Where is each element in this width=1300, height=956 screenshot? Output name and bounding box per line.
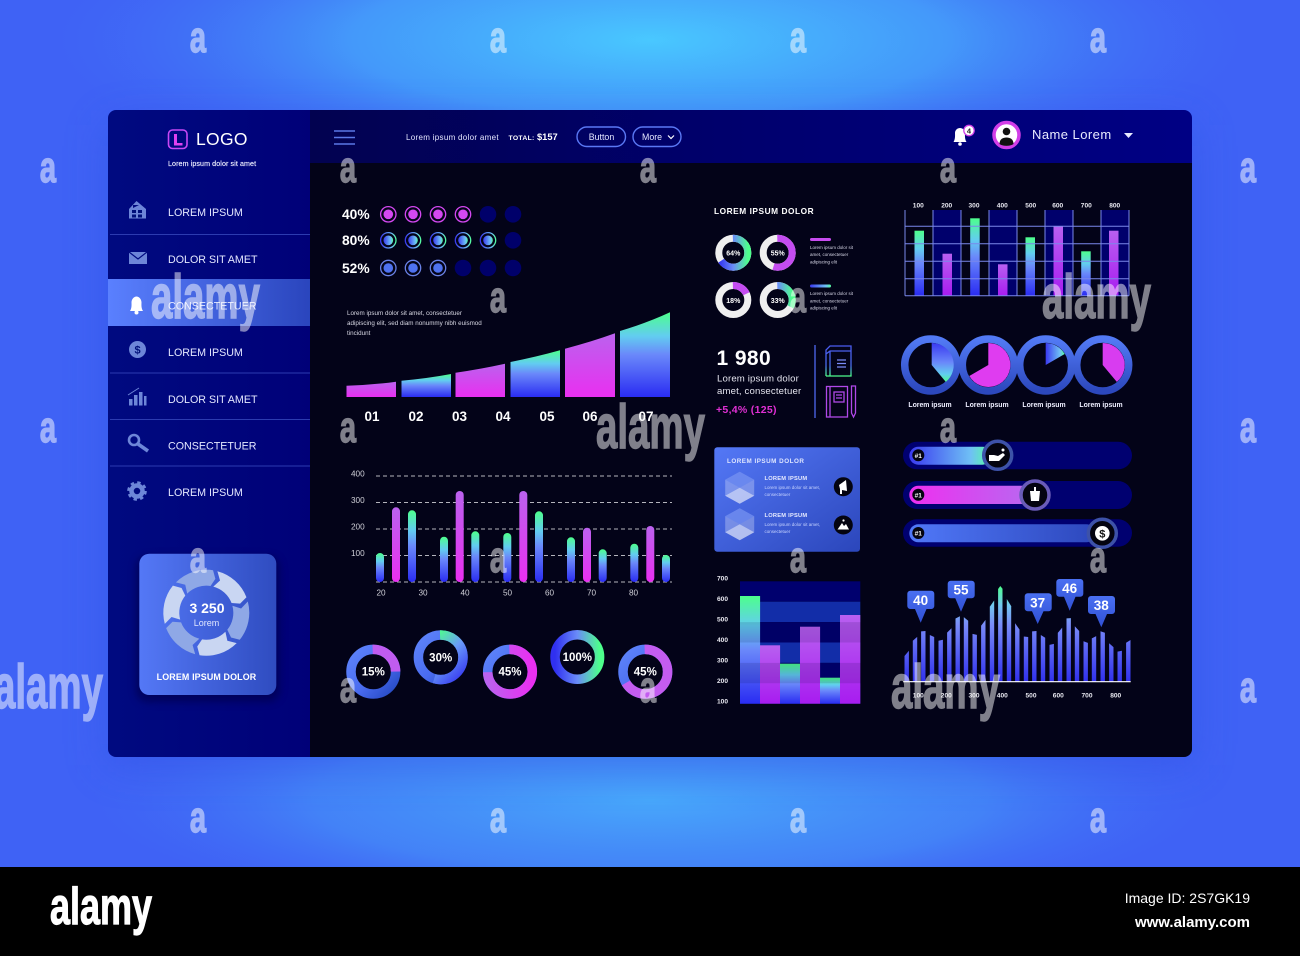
legend: amet, consectetuer xyxy=(810,298,849,304)
pie ring 2 xyxy=(962,339,1014,391)
y labels: 500 xyxy=(717,617,728,624)
watermarks: a xyxy=(190,532,206,581)
x labels: 05 xyxy=(539,409,555,424)
donut: 30%: 30% xyxy=(429,652,452,664)
watermarks: a xyxy=(940,142,956,191)
watermarks: a xyxy=(490,272,506,321)
icon: home xyxy=(129,201,146,218)
watermarks: a xyxy=(490,12,506,61)
knob xyxy=(1021,481,1049,509)
x labels: 100 xyxy=(913,202,924,210)
logo block: Lorem ipsum dolor sit amet xyxy=(168,160,256,168)
pie rings row xyxy=(905,339,1129,409)
tag: 37: 37 xyxy=(1030,595,1045,610)
watermarks: a xyxy=(1090,12,1106,61)
slider 2: #1 xyxy=(915,492,922,499)
x labels: 300 xyxy=(968,692,980,700)
x labels: 50 xyxy=(503,588,512,598)
slider 1: #1 xyxy=(915,453,922,460)
icon: megaphone xyxy=(834,477,853,496)
y labels: 600 xyxy=(717,596,728,603)
icon: bell xyxy=(130,296,143,314)
sidebar card: 3 250: LOREM IPSUM DOLOR xyxy=(157,672,257,682)
icon: dollar: $ xyxy=(134,344,141,356)
info card: cubes: LOREM IPSUM xyxy=(764,476,807,482)
button xyxy=(577,127,626,146)
icon: books xyxy=(826,346,851,376)
knob xyxy=(984,441,1012,469)
x labels: 70 xyxy=(587,588,596,598)
x labels: 200 xyxy=(941,202,953,210)
x labels: 30 xyxy=(418,588,428,598)
donut: 30% xyxy=(418,635,463,680)
x labels: 80 xyxy=(629,588,638,598)
stat block: 1 980: 1 980 xyxy=(716,347,771,370)
header controls: Lorem ipsum dolor amet xyxy=(406,133,499,142)
dashboard panel xyxy=(108,110,1192,757)
logo block xyxy=(168,129,256,168)
x labels: 700 xyxy=(1081,202,1092,210)
pie ring 1 xyxy=(905,339,957,391)
footer strip: www.alamy.com xyxy=(1134,914,1250,931)
text block: description: Lorem ipsum dolor sit amet, consectetuer xyxy=(347,310,462,317)
stat block: 1 980: Lorem ipsum dolor xyxy=(717,374,800,384)
user area xyxy=(954,122,1133,148)
column shading xyxy=(933,210,1129,296)
donut 55%: 55% xyxy=(771,250,785,258)
x labels: 800 xyxy=(1110,692,1122,700)
tag: 46 xyxy=(1056,579,1083,611)
x labels: 100 xyxy=(913,692,924,700)
watermarks: a xyxy=(940,402,956,451)
axis labels xyxy=(351,470,365,558)
more button: More xyxy=(642,132,662,142)
tag: 38: 38 xyxy=(1094,598,1109,613)
row 52% xyxy=(381,260,521,276)
tag: 55: 55 xyxy=(953,582,969,598)
sidebar menu: CONSECTETUER xyxy=(168,300,257,312)
legend: adipiscing elit xyxy=(810,306,838,310)
text block: description: tincidunt xyxy=(347,330,371,337)
panel: small donuts xyxy=(714,206,854,314)
knob xyxy=(1088,519,1116,547)
grid bar chart: 100-800 xyxy=(905,202,1129,296)
donut: 100% xyxy=(555,635,600,679)
percent dot rows: 80% xyxy=(342,233,370,248)
x labels: 06 xyxy=(582,409,598,424)
stat block: 1 980: amet, consectetuer xyxy=(717,386,802,397)
icon: dollar xyxy=(129,341,146,358)
tag: 40 xyxy=(907,591,934,623)
x labels xyxy=(364,409,654,424)
x labels: 500 xyxy=(1025,202,1037,210)
active item band xyxy=(108,279,310,326)
x labels: 20 xyxy=(376,588,386,598)
pie ring 4 xyxy=(1077,339,1129,391)
footer strip: alamy xyxy=(50,878,152,936)
info card: cubes: consectetuer xyxy=(764,529,791,534)
watermarks: a xyxy=(640,142,656,191)
y labels: 200 xyxy=(717,678,728,685)
x labels: 07 xyxy=(638,409,654,424)
watermarks: a xyxy=(790,792,806,841)
header controls xyxy=(334,127,681,146)
percent dot rows: 40% xyxy=(342,207,370,222)
sidebar card: 3 250: Lorem xyxy=(194,618,219,628)
spikes xyxy=(904,586,1130,682)
axis labels: 100 xyxy=(351,549,365,558)
menu labels: LOREM IPSUM xyxy=(168,207,243,219)
sidebar menu: LOREM IPSUM xyxy=(168,487,243,499)
pie rings row: Lorem ipsum xyxy=(908,402,952,409)
bands xyxy=(740,581,860,602)
watermarks: alamy xyxy=(891,653,1000,722)
header controls: $157 xyxy=(537,132,558,142)
legend: Lorem ipsum dolor sit xyxy=(810,245,854,250)
watermarks: a xyxy=(340,142,356,191)
row 40% xyxy=(381,206,521,223)
x labels: 600 xyxy=(1052,202,1064,210)
main dark area xyxy=(310,163,1192,757)
sidebar menu: DOLOR SIT AMET xyxy=(168,254,258,266)
axis labels: 200 xyxy=(351,522,365,532)
watermarks: a xyxy=(640,662,656,711)
x labels: 400 xyxy=(997,692,1008,700)
axis labels: 300 xyxy=(351,496,365,505)
watermarks: alamy xyxy=(596,393,705,462)
icon: hamburger menu xyxy=(334,131,355,144)
slider 2 xyxy=(903,481,1132,509)
y labels: 300 xyxy=(717,658,728,665)
watermarks: a xyxy=(1240,662,1256,711)
watermarks: alamy xyxy=(151,263,260,332)
watermarks: a xyxy=(790,272,806,321)
slider 3 xyxy=(903,519,1132,547)
row 80% xyxy=(381,232,521,249)
column chart with dashed grid xyxy=(351,470,672,598)
stat block: 1 980 xyxy=(716,345,856,418)
icon: mail xyxy=(129,252,147,264)
y labels xyxy=(717,576,728,706)
donut 33%: 33% xyxy=(771,298,785,305)
pie rings row: Lorem ipsum xyxy=(965,402,1009,409)
watermarks: a xyxy=(790,12,806,61)
watermarks: a xyxy=(190,12,206,61)
watermarks: a xyxy=(40,402,56,451)
watermarks: a xyxy=(1090,532,1106,581)
x labels: 04 xyxy=(495,409,511,424)
watermarks: a xyxy=(340,662,356,711)
legend: amet, consectetuer xyxy=(810,252,849,257)
sidebar menu xyxy=(108,201,310,500)
area bar chart: 01-07 xyxy=(346,312,670,424)
x labels: 03 xyxy=(452,409,467,424)
pie rings row: Lorem ipsum xyxy=(1022,402,1066,409)
x labels: 40 xyxy=(460,588,470,598)
percent dot rows xyxy=(342,206,521,276)
icon: notification bell: 4 xyxy=(967,126,972,135)
donut: 45% right: 45% xyxy=(634,667,657,679)
icon: gear xyxy=(128,482,146,500)
sidebar card: 3 250: 3 250 xyxy=(189,600,225,616)
watermarks: a xyxy=(490,792,506,841)
bars xyxy=(914,218,1118,296)
icon: bar chart xyxy=(128,388,146,406)
button: Button xyxy=(589,132,614,142)
slider 1 xyxy=(903,441,1132,469)
spike chart xyxy=(903,579,1131,700)
legend: Lorem ipsum dolor sit xyxy=(810,291,854,296)
icon: dropdown arrow xyxy=(1124,133,1133,138)
percent dot rows: 52% xyxy=(342,261,370,276)
watermarks: a xyxy=(1240,142,1256,191)
bars xyxy=(740,596,860,704)
circular arrows ring xyxy=(159,567,253,659)
tag: 46: 46 xyxy=(1062,581,1078,596)
x labels: 400 xyxy=(997,202,1008,210)
x labels: 300 xyxy=(968,202,980,210)
x labels xyxy=(376,588,638,598)
donut: 45%: 45% xyxy=(498,667,522,679)
text block: description xyxy=(347,310,482,337)
watermarks: a xyxy=(190,792,206,841)
x labels: 600 xyxy=(1053,692,1064,700)
footer strip xyxy=(0,867,1300,956)
stacked band chart xyxy=(717,576,860,706)
donut 18%: 18% xyxy=(726,298,741,305)
donut: 15% xyxy=(351,649,396,694)
sidebar background xyxy=(108,110,318,757)
x labels: 800 xyxy=(1109,202,1121,210)
pie ring 3 xyxy=(1020,339,1072,391)
x labels: 500 xyxy=(1025,692,1037,700)
donut: 15%: 15% xyxy=(362,667,385,679)
icon: cube 2 xyxy=(725,508,754,540)
info card: cubes: Lorem ipsum dolor sit amet, xyxy=(764,522,820,527)
donut: 45% xyxy=(488,649,532,694)
x labels: 60 xyxy=(545,588,554,598)
donut: 100%: 100% xyxy=(563,652,592,664)
watermarks: a xyxy=(340,402,356,451)
info card: cubes: LOREM IPSUM DOLOR xyxy=(727,458,804,465)
watermarks: a xyxy=(40,142,56,191)
x labels: 02 xyxy=(408,409,424,424)
user area: Name Lorem xyxy=(1032,127,1112,142)
sidebar menu: LOREM IPSUM xyxy=(168,347,243,359)
icon: landscape xyxy=(834,516,853,534)
more button xyxy=(633,127,681,146)
header bar xyxy=(310,110,1192,163)
stat block: 1 980: +5,4% (125) xyxy=(716,404,777,416)
pie rings row: Lorem ipsum xyxy=(1079,402,1123,409)
info card: cubes: LOREM IPSUM xyxy=(764,513,807,519)
header controls: TOTAL: xyxy=(508,135,535,142)
x labels: 01 xyxy=(364,409,380,424)
watermarks: a xyxy=(1090,792,1106,841)
sidebar menu: CONSECTETUER xyxy=(168,440,257,452)
y labels: 700 xyxy=(717,576,728,583)
tag: 40: 40 xyxy=(913,593,928,608)
legend: adipiscing elit xyxy=(810,260,838,264)
watermarks: a xyxy=(490,532,506,581)
legend xyxy=(810,238,854,310)
bars xyxy=(376,491,670,582)
tag: 38 xyxy=(1088,596,1115,627)
watermarks: alamy xyxy=(1042,263,1151,332)
panel: small donuts: LOREM IPSUM DOLOR xyxy=(714,206,814,216)
icon: cube 1 xyxy=(725,472,754,504)
watermarks: a xyxy=(790,532,806,581)
info card: cubes: Lorem ipsum dolor sit amet, xyxy=(764,485,820,490)
icon: avatar xyxy=(994,122,1019,148)
icon: notification bell xyxy=(954,125,974,146)
slider 3: #1 xyxy=(915,531,922,538)
donut: 45% right xyxy=(623,649,668,694)
logo block: LOGO xyxy=(196,129,248,149)
x labels: 200 xyxy=(941,692,952,700)
sidebar card: 3 250 xyxy=(136,554,280,702)
watermarks: a xyxy=(1240,402,1256,451)
sidebar menu: DOLOR SIT AMET xyxy=(168,394,258,406)
tag: 37 xyxy=(1025,593,1052,624)
info card: cubes xyxy=(714,447,860,552)
knob: $ xyxy=(1099,528,1105,540)
donut 64%: 64% xyxy=(726,250,741,258)
info card: cubes: consectetuer xyxy=(764,492,791,497)
axis labels: 400 xyxy=(351,470,365,478)
footer strip: Image ID: 2S7GK19 xyxy=(1125,890,1250,906)
text block: description: adipiscing elit, sed diam nonummy nibh euismod xyxy=(347,320,482,327)
y labels: 100 xyxy=(717,699,728,706)
icon: search xyxy=(129,435,148,451)
x labels xyxy=(913,692,1122,700)
icon: notebook and pencil xyxy=(826,386,856,417)
x labels: 700 xyxy=(1081,692,1093,700)
tag: 55 xyxy=(948,581,975,612)
y labels: 400 xyxy=(717,637,728,644)
x labels xyxy=(913,202,1121,210)
